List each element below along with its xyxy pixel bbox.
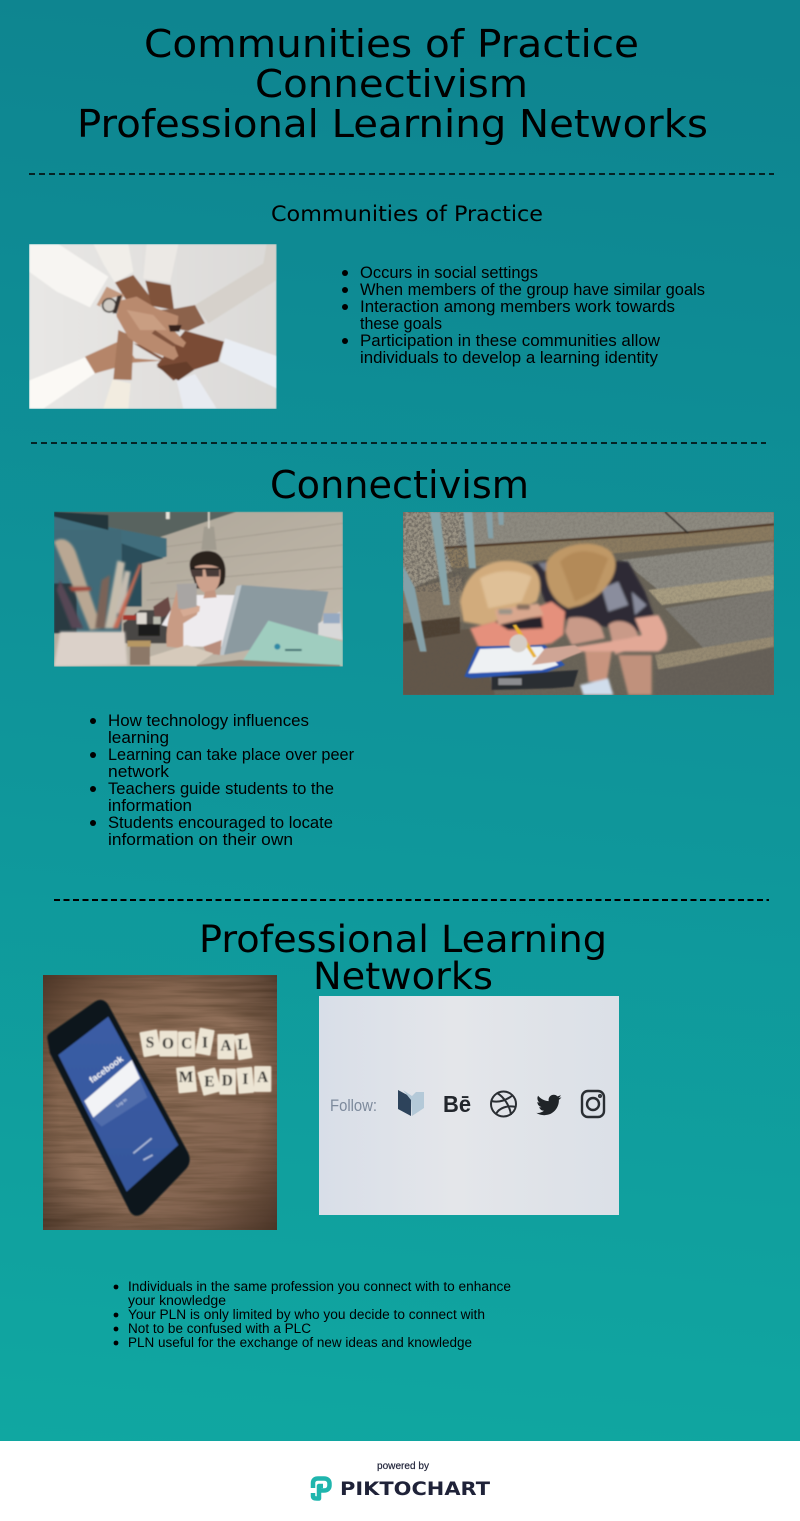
icon: letter tiles: A bbox=[220, 1038, 232, 1055]
footer: powered by piktochart bbox=[0, 1441, 800, 1521]
icon: letter tiles: E bbox=[204, 1074, 214, 1091]
main title: Communities of Practice bbox=[144, 22, 639, 66]
bullet list: communities of practice: these goals bbox=[360, 315, 442, 333]
bullet list: professional learning networks: Your PLN is only limited by who you decide to connect with bbox=[128, 1307, 485, 1322]
photo: woman with phone and laptop bbox=[54, 512, 343, 667]
main title bbox=[77, 22, 708, 146]
footer: powered by piktochart: powered by bbox=[377, 1461, 429, 1472]
bullet list: communities of practice: individuals to develop a learning identity bbox=[360, 349, 659, 367]
bullet list: connectivism: Teachers guide students to the bbox=[108, 780, 334, 798]
bullet list: communities of practice: Interaction among members work towards bbox=[360, 298, 675, 316]
bullet list: communities of practice: Occurs in social settings bbox=[360, 264, 538, 282]
icon: twitter bbox=[536, 1095, 561, 1115]
icon: dribbble bbox=[491, 1092, 516, 1116]
icon: letter tiles: S bbox=[146, 1034, 154, 1051]
icon: smartphone bbox=[47, 1000, 190, 1216]
bullet list: professional learning networks: Individuals in the same profession you connect with to enhance bbox=[128, 1279, 511, 1294]
icon: letter tiles: C bbox=[181, 1036, 192, 1053]
icon: letter tiles: D bbox=[222, 1072, 233, 1089]
main title: Connectivism bbox=[255, 62, 528, 106]
heading: connectivism: Connectivism bbox=[270, 463, 529, 507]
bullet list: communities of practice: Participation in these communities allow bbox=[360, 332, 660, 350]
icon: letter tiles: O bbox=[162, 1036, 174, 1053]
icon: letter tiles: A bbox=[257, 1069, 268, 1086]
photo: follow screen with social icons bbox=[319, 996, 619, 1215]
bullet list: connectivism: Students encouraged to locate bbox=[108, 814, 333, 832]
icon: smartphone: Log In bbox=[115, 1097, 128, 1108]
photo: two children on steps bbox=[403, 512, 774, 695]
bullet list: connectivism: Learning can take place over peer bbox=[108, 746, 354, 764]
bullet list: connectivism: network bbox=[108, 763, 170, 781]
bullet list: connectivism: information bbox=[108, 797, 192, 815]
icon: letter tiles: I bbox=[202, 1034, 208, 1051]
heading: professional learning networks bbox=[199, 918, 607, 998]
heading: professional learning networks: Networks bbox=[313, 955, 493, 998]
icon: letter tiles bbox=[139, 1028, 271, 1096]
photo: stacked hands bbox=[29, 244, 277, 409]
bullet list: connectivism: learning bbox=[108, 729, 169, 747]
icon: medium bbox=[398, 1090, 424, 1116]
icon: instagram bbox=[582, 1091, 604, 1117]
photo: social media phone and tiles bbox=[43, 975, 277, 1230]
main title: Professional Learning Networks bbox=[77, 102, 708, 146]
bullet list: connectivism: How technology influences bbox=[108, 712, 309, 730]
heading: professional learning networks: Professional Learning bbox=[199, 918, 607, 961]
bullet list: professional learning networks: PLN useful for the exchange of new ideas and knowledge bbox=[128, 1335, 472, 1350]
text: follow: Follow: bbox=[330, 1097, 377, 1115]
bullet list: communities of practice: When members of the group have similar goals bbox=[360, 281, 705, 299]
icon: letter tiles: M bbox=[179, 1069, 194, 1086]
footer: powered by piktochart: PIKTOCHART bbox=[340, 1478, 490, 1500]
icon: smartphone: facebook bbox=[87, 1054, 125, 1085]
bullet list: professional learning networks: your knowledge bbox=[128, 1293, 226, 1308]
bullet list: professional learning networks: Not to be confused with a PLC bbox=[128, 1321, 311, 1336]
icon: behance: Bē bbox=[443, 1091, 471, 1117]
bullet list: connectivism bbox=[90, 712, 354, 849]
icon: letter tiles: L bbox=[238, 1036, 248, 1053]
bullet list: professional learning networks bbox=[114, 1279, 511, 1350]
bullet list: connectivism: information on their own bbox=[108, 831, 293, 849]
icon: letter tiles: I bbox=[242, 1071, 248, 1088]
heading: communities of practice: Communities of Practice bbox=[271, 202, 543, 226]
bullet list: communities of practice bbox=[342, 264, 705, 367]
icon: piktochart logo bbox=[313, 1478, 330, 1498]
